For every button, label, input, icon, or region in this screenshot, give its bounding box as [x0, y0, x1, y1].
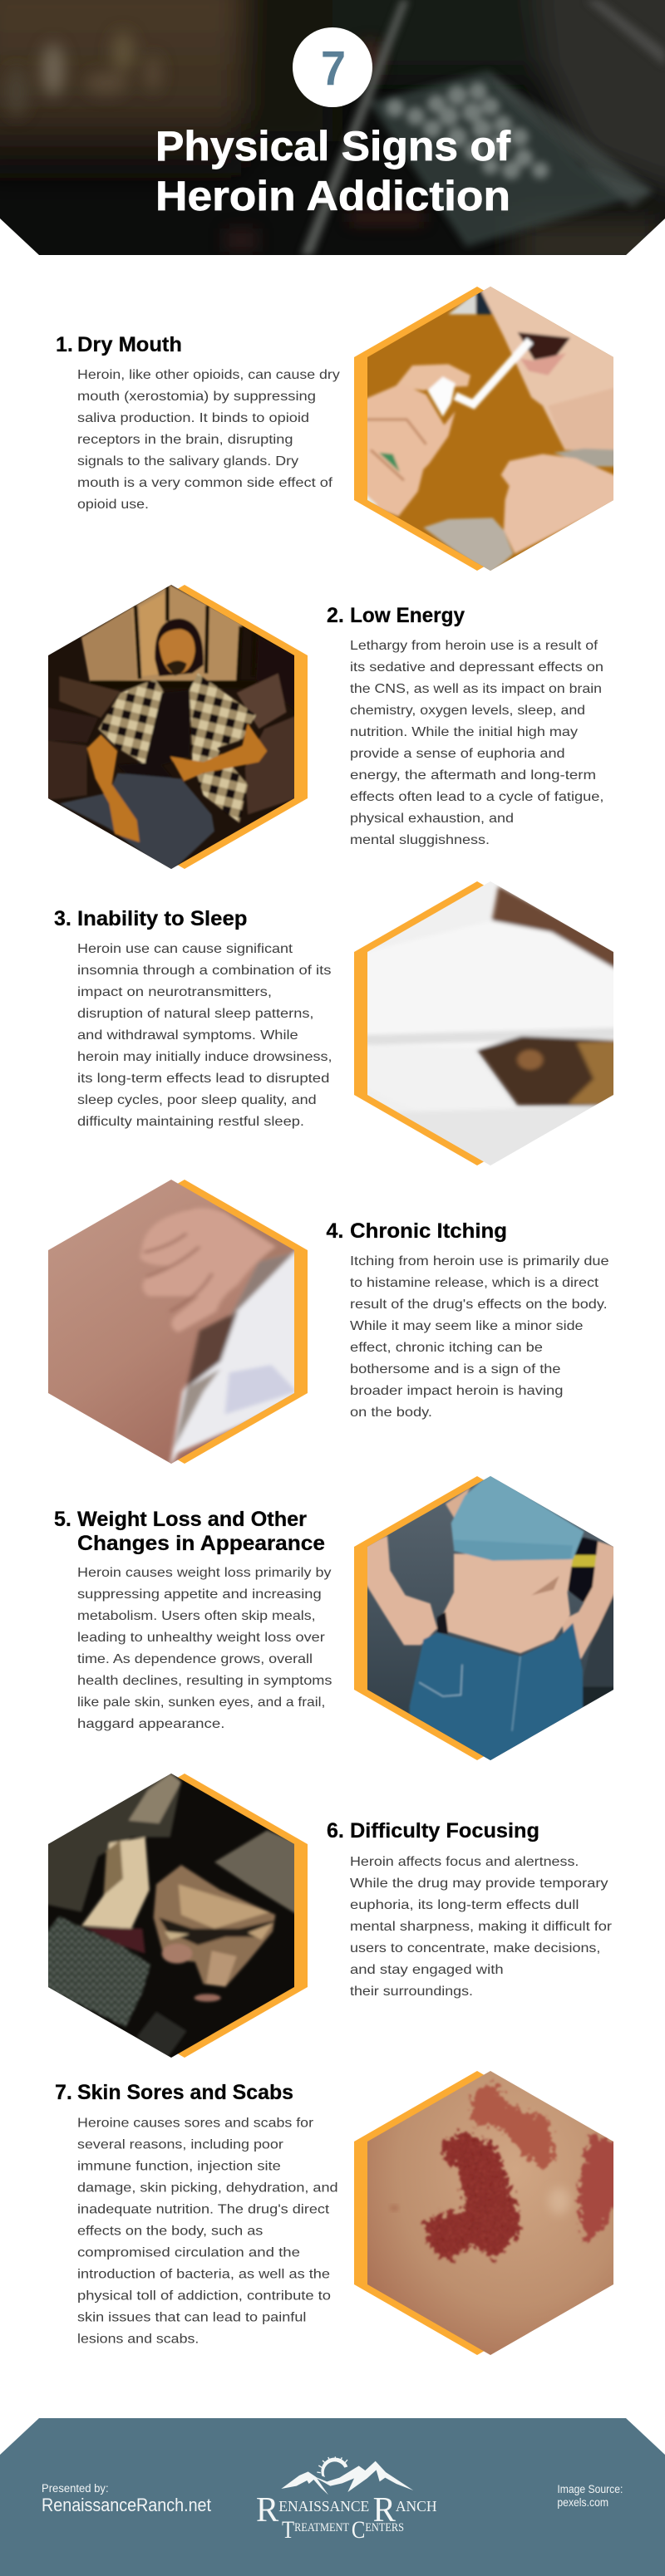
text block: skin sores [77, 2117, 338, 2346]
heading: skin sores and scabs: 7. [55, 2081, 72, 2104]
text block: dry mouth: Heroin, like other opioids, can cause dry [77, 368, 340, 382]
text block: inability to sleep: impact on neurotransmitters, [77, 985, 272, 999]
logo wordmark: ANCH [396, 2498, 437, 2515]
text block: chronic itching: Itching from heroin use is primarily due [350, 1254, 609, 1268]
text block: low energy: effects often lead to a cycle of fatigue, [350, 790, 603, 804]
icon: orange hexagon backing [354, 1476, 600, 1760]
text block: low energy: chemistry, oxygen levels, sleep, and [350, 704, 585, 718]
title: Physical Signs of [155, 123, 510, 169]
text block: inability to sleep: insomnia through a combination of its [77, 964, 331, 978]
photo: hand scratching skin [48, 1180, 301, 1468]
text block: dry mouth: mouth is a very common side effect of [77, 476, 333, 490]
text block: low energy: physical exhaustion, and [350, 812, 514, 826]
text block: presented by: Presented by: [42, 2482, 109, 2495]
panel: sign 2 low energy [42, 585, 604, 873]
logo: renaissance ranch: REATMENT [294, 2521, 352, 2534]
text block: low energy: mental sluggishness. [350, 833, 490, 847]
text block: dry mouth: saliva production. It binds to opioid [77, 411, 309, 425]
photo: person in pain holding head [42, 1771, 298, 2062]
text block: skin sores: effects on the body, such as [77, 2225, 263, 2238]
number badge: 7 [321, 42, 346, 96]
logo: renaissance ranch: C [352, 2516, 365, 2544]
text block: skin sores: immune function, injection site [77, 2160, 281, 2173]
text block: weight loss: leading to unhealthy weight loss over [77, 1631, 326, 1645]
panel: sign 3 inability to sleep [54, 881, 628, 1175]
text block: skin sores: physical toll of addiction, contribute to [77, 2289, 331, 2303]
text block: difficulty focusing: users to concentrate, make decisions, [350, 1941, 600, 1955]
text block: weight loss: health declines, resulting in symptoms [77, 1674, 332, 1688]
text block: difficulty focusing: mental sharpness, making it difficult for [350, 1920, 613, 1934]
text block: weight loss: haggard appearance. [77, 1717, 224, 1731]
photo: skin rash [367, 2071, 620, 2355]
header photo: bag of pills [0, 0, 665, 274]
text block: image source [557, 2483, 623, 2509]
text block: chronic itching: result of the drug's effects on the body. [350, 1298, 608, 1312]
text block: low energy: energy, the aftermath and long-term [350, 768, 596, 783]
photo: person under pillow [367, 881, 613, 1165]
text block: low energy [350, 639, 603, 847]
text block: weight loss [77, 1566, 332, 1731]
text block: dry mouth: opioid use. [77, 498, 149, 512]
icon: orange hexagon backing [62, 585, 308, 869]
text block: dry mouth: receptors in the brain, disrupting [77, 433, 293, 447]
heading: low energy: Low Energy [350, 604, 465, 627]
photo: throat spray into mouth [362, 284, 620, 575]
text block: skin sores: inadequate nutrition. The drug's direct [77, 2203, 330, 2216]
text block: chronic itching: broader impact heroin is having [350, 1384, 564, 1398]
text block: difficulty focusing: their surroundings. [350, 1985, 473, 1999]
heading: skin sores and scabs: Skin Sores and Scabs [77, 2081, 293, 2104]
heading: difficulty focusing: Difficulty Focusing [350, 1819, 539, 1842]
text block: difficulty focusing: While the drug may provide temporary [350, 1877, 608, 1891]
logo: renaissance ranch [256, 2456, 437, 2544]
panel: sign 6 difficulty focusing [42, 1771, 613, 2062]
text block: low energy: provide a sense of euphoria and [350, 747, 565, 761]
icon: orange hexagon backing [62, 1180, 308, 1464]
text block: presented by [42, 2482, 211, 2515]
text block: weight loss: time. As dependence grows, overall [77, 1652, 313, 1666]
icon: orange hexagon backing [62, 1774, 308, 2058]
text block: chronic itching: While it may seem like a minor side [350, 1319, 584, 1333]
icon: orange hexagon backing [354, 287, 600, 571]
text block: skin sores: damage, skin picking, dehydration, and [77, 2181, 338, 2195]
logo: renaissance ranch: ENTERS [365, 2521, 404, 2534]
text block: weight loss: Heroin causes weight loss primarily by [77, 1566, 331, 1580]
text block: inability to sleep: its long-term effects lead to disrupted [77, 1072, 329, 1086]
text block: presented by: RenaissanceRanch.net [42, 2495, 211, 2515]
icon: sun and mountains [281, 2456, 413, 2495]
text block: dry mouth: mouth (xerostomia) by suppressing [77, 390, 316, 404]
icon: orange hexagon backing [354, 2071, 600, 2355]
heading: weight loss and other changes in appearance [54, 1508, 325, 1555]
heading: weight loss and other changes in appearance: 5. [54, 1508, 71, 1531]
text block: inability to sleep: disruption of natural sleep patterns, [77, 1007, 314, 1021]
heading: chronic itching: 4. [326, 1219, 343, 1243]
text block: skin sores: compromised circulation and the [77, 2246, 300, 2260]
text block: low energy: Lethargy from heroin use is a result of [350, 639, 598, 653]
title: Heroin Addiction [155, 173, 510, 219]
logo wordmark: R [256, 2491, 278, 2529]
panel: footer [0, 2418, 665, 2576]
text block: difficulty focusing: and stay engaged with [350, 1963, 504, 1977]
text block: skin sores: lesions and scabs. [77, 2333, 199, 2346]
panel: sign 4 chronic itching [48, 1180, 609, 1468]
panel: sign 7 skin sores [55, 2071, 620, 2355]
text block: chronic itching [350, 1254, 609, 1420]
heading: difficulty focusing: 6. [327, 1819, 344, 1842]
heading: dry mouth: Dry Mouth [77, 333, 182, 356]
text block: low energy: nutrition. While the initial high may [350, 725, 578, 739]
text block: inability to sleep: difficulty maintaining restful sleep. [77, 1115, 304, 1129]
heading: low energy: 2. [327, 604, 344, 627]
panel: sign 1 dry mouth [56, 284, 620, 575]
photo: exhausted man on sofa [42, 585, 298, 873]
text block: image source: pexels.com [557, 2496, 608, 2509]
text block: skin sores: skin issues that can lead to painful [77, 2311, 306, 2324]
text block: skin sores: Heroine causes sores and scabs for [77, 2117, 314, 2130]
text block: chronic itching: bothersome and is a sign of the [350, 1362, 561, 1376]
icon: orange hexagon backing [354, 881, 600, 1165]
panel: sign 5 weight loss [54, 1474, 620, 1764]
heading: inability to sleep: 3. [54, 907, 71, 930]
number badge [293, 27, 372, 107]
text block: inability to sleep: sleep cycles, poor sleep quality, and [77, 1093, 317, 1107]
text block: inability to sleep [77, 942, 332, 1129]
text block: difficulty focusing: Heroin affects focus and alertness. [350, 1855, 579, 1869]
text block: image source: Image Source: [557, 2483, 623, 2495]
heading: weight loss and other changes in appearance: Changes in Appearance [77, 1532, 325, 1555]
text block: dry mouth [77, 368, 340, 512]
text block: weight loss: metabolism. Users often skip meals, [77, 1609, 316, 1623]
text block: skin sores: introduction of bacteria, as well as the [77, 2268, 330, 2281]
logo wordmark: R [373, 2491, 396, 2529]
logo: renaissance ranch: T [282, 2516, 294, 2544]
heading: dry mouth: 1. [56, 333, 73, 356]
logo wordmark: ENAISSANCE [278, 2498, 373, 2515]
title [155, 123, 510, 219]
text block: weight loss: suppressing appetite and increasing [77, 1587, 322, 1602]
heading: chronic itching: Chronic Itching [350, 1219, 507, 1243]
text block: inability to sleep: Heroin use can cause significant [77, 942, 293, 956]
heading: inability to sleep: Inability to Sleep [77, 907, 248, 930]
text block: chronic itching: effect, chronic itching can be [350, 1341, 543, 1355]
text block: dry mouth: signals to the salivary glands. Dry [77, 454, 298, 469]
text block: difficulty focusing: euphoria, its long-term effects dull [350, 1898, 579, 1912]
panel: header banner [0, 0, 665, 274]
heading: weight loss and other changes in appearance: Weight Loss and Other [77, 1508, 307, 1531]
text block: skin sores: several reasons, including poor [77, 2138, 284, 2152]
text block: inability to sleep: and withdrawal symptoms. While [77, 1028, 298, 1043]
text block: chronic itching: on the body. [350, 1406, 432, 1420]
photo: waist in oversized jeans [362, 1474, 620, 1764]
text block: difficulty focusing [350, 1855, 613, 1999]
text block: chronic itching: to histamine release, which is a direct [350, 1276, 599, 1290]
text block: inability to sleep: heroin may initially induce drowsiness, [77, 1050, 332, 1064]
text block: low energy: the CNS, as well as its impact on brain [350, 682, 602, 696]
text block: low energy: its sedative and depressant effects on [350, 660, 603, 675]
text block: weight loss: like pale skin, sunken eyes, and a frail, [77, 1695, 325, 1710]
